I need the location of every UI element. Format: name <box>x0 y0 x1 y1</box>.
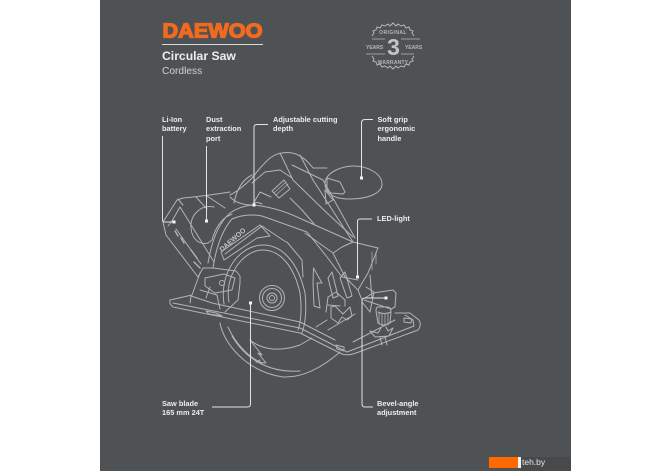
icon: 3 years warranty badge: WARRANTY <box>378 60 409 66</box>
label: Dust extraction port: port <box>206 134 220 143</box>
label: Saw blade: 165 mm 24T <box>162 408 204 417</box>
label: Bevel-angle adjustment: adjustment <box>377 408 416 417</box>
arbor nut <box>260 286 284 310</box>
label: Saw blade: Saw blade <box>162 398 198 408</box>
motor housing and arrows <box>305 233 378 308</box>
label: Li-Ion battery <box>162 115 187 133</box>
label: Adjustable cutting depth: depth <box>273 124 293 133</box>
label: LED-light: LED-light <box>377 214 410 223</box>
bevel-angle adjustment knob <box>362 287 396 345</box>
label: Soft grip ergonomic handle: Soft grip <box>378 115 408 124</box>
label: Soft grip ergonomic handle: ergonomic <box>378 124 415 133</box>
icon: 3 years warranty badge: YEARS <box>405 45 423 51</box>
label: Dust extraction port: extraction <box>206 124 241 133</box>
dust extraction port <box>191 207 232 243</box>
icon: 3 years warranty badge: YEARS <box>366 45 384 51</box>
main handle and body <box>230 153 355 242</box>
front pivot bracket <box>192 268 240 312</box>
watermark <box>489 457 571 471</box>
lower blade and guard <box>220 323 340 377</box>
label: Adjustable cutting depth: Adjustable cutting <box>273 115 337 124</box>
panel: dark background <box>100 0 571 471</box>
rear pivot bracket <box>326 292 352 323</box>
label: Dust extraction port <box>206 115 241 143</box>
brand text on guard: DAEWOO <box>219 227 248 254</box>
soft grip handle <box>325 166 382 204</box>
title block <box>162 44 263 77</box>
base plate <box>170 295 420 355</box>
title block: Cordless <box>162 66 202 77</box>
label: Dust extraction port: Dust <box>206 115 222 124</box>
label: Soft grip ergonomic handle <box>378 115 415 143</box>
label: Adjustable cutting depth <box>273 115 337 133</box>
title block: Circular Saw <box>162 49 236 63</box>
label: Bevel-angle adjustment <box>377 398 418 417</box>
battery <box>163 192 230 277</box>
icon: 3 years warranty badge: 3 <box>387 34 400 60</box>
label: Li-Ion battery: Li-Ion <box>162 115 182 124</box>
watermark: teh.by <box>522 457 545 467</box>
icon: 3 years warranty badge: ORIGINAL <box>379 30 407 36</box>
label: Bevel-angle adjustment: Bevel-angle <box>377 398 418 408</box>
logo: Daewoo: DAEWOO <box>162 20 263 42</box>
label: Saw blade <box>162 398 204 417</box>
upper blade guard <box>208 202 358 333</box>
label: Li-Ion battery: battery <box>162 124 187 133</box>
label: Soft grip ergonomic handle: handle <box>378 134 401 143</box>
